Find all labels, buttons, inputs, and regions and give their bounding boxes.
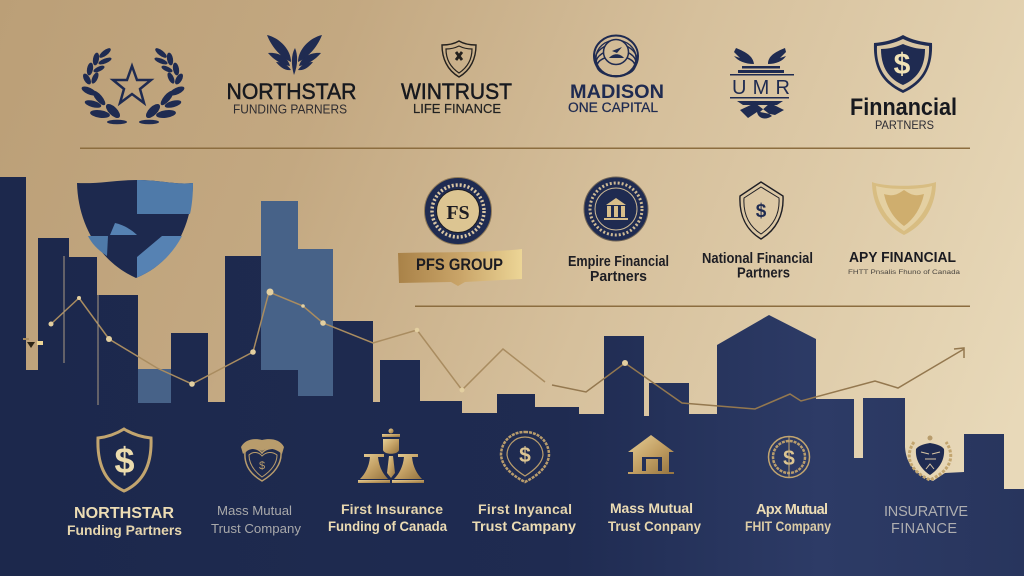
icon: gold coin: $ (783, 447, 795, 470)
logo: Northstar: FUNDING PARNERS (233, 102, 347, 116)
laurel left (80, 47, 127, 124)
icon: outline shield: $ (756, 201, 767, 222)
city skyline bar chart (0, 177, 1024, 576)
icon: laurel medal: $ (519, 444, 531, 467)
small gold marker (23, 338, 43, 348)
logo: Mass Mutual: Mass Mutual (217, 504, 292, 518)
blue bars (138, 201, 333, 403)
divider: top (80, 148, 970, 149)
logo: Northstar gold: NORTHSTAR (74, 505, 174, 522)
logo: Mass Mutual house: Trust Conpany (608, 518, 701, 534)
logo: First Insurance: Funding of Canada (328, 518, 447, 534)
icon: seal: FS (446, 202, 470, 224)
icon: wings (267, 35, 322, 75)
logo: APY Financial (848, 182, 960, 276)
logo: PFS Group (398, 178, 522, 286)
logo: First Inyancal (472, 432, 576, 534)
logo: Mass Mutual (211, 439, 301, 536)
logo: Madison: ONE CAPITAL (568, 100, 658, 115)
logo: UMR: UMR (732, 77, 790, 99)
logo: Northstar gold: Funding Partners (67, 522, 182, 538)
logo: First Inyancal: Trust Campany (472, 518, 576, 534)
logo: Financial: Finnancial (850, 94, 957, 121)
logo: Empire Financial: Partners (590, 269, 647, 285)
logo: Wintrust: LIFE FINANCE (413, 101, 501, 116)
icon: dollar shield: $ (894, 48, 911, 81)
top row logos (80, 35, 957, 132)
logo: Wintrust: WINTRUST (401, 79, 512, 104)
divider: middle (415, 306, 970, 307)
logo: National Financial (702, 182, 813, 282)
logo: Apx Mutual (745, 436, 831, 534)
line markers (48, 288, 628, 392)
logo: National Financial: Partners (737, 266, 790, 282)
icon: swirl circle (594, 36, 638, 76)
logo: APY Financial: APY FINANCIAL (849, 250, 956, 266)
logo: Madison: MADISON (570, 82, 664, 103)
icon: gold house (628, 435, 674, 474)
icon: bank seal (584, 177, 648, 241)
large blue shield (77, 180, 193, 278)
logo: National Financial: National Financial (702, 251, 813, 267)
logo: Northstar gold (67, 429, 182, 538)
logo: Apx Mutual: FHIT Company (745, 518, 831, 534)
logo: laurel star (80, 47, 186, 124)
logo: Insurative Finance (884, 436, 968, 537)
logo: Empire Financial (568, 177, 669, 285)
logo: First Inyancal: First Inyancal (478, 501, 572, 517)
logo: UMR (730, 48, 794, 119)
logo: Northstar (226, 35, 356, 116)
logo: Insurative Finance: INSURATIVE (884, 504, 968, 520)
ribbon (398, 249, 522, 286)
icon: gold shield (872, 182, 936, 235)
logo: Mass Mutual: Trust Company (211, 521, 301, 536)
logo: Insurative Finance: FINANCE (891, 521, 957, 537)
logo: First Insurance (328, 428, 447, 534)
logo: Financial: PARTNERS (875, 120, 934, 132)
logo: Apx Mutual: Apx Mutual (756, 502, 828, 518)
logo: Northstar: NORTHSTAR (226, 79, 356, 104)
logo: Wintrust (401, 41, 512, 116)
logo: First Insurance: First Insurance (341, 501, 443, 517)
logo: APY Financial: FHTT Pnsalis Fhuno of Canada (848, 269, 960, 276)
icon: shield (442, 41, 476, 77)
bottom row logos (67, 428, 968, 538)
icon: feathers (730, 48, 794, 119)
logo: Mass Mutual house: Mass Mutual (610, 500, 693, 516)
icon: crest with laurel (909, 436, 951, 480)
logo: Financial (850, 35, 957, 132)
middle row logos (398, 177, 960, 286)
gold trend line with arrow (48, 256, 964, 409)
logo: PFS Group: PFS GROUP (416, 256, 503, 274)
logo: Mass Mutual house (608, 435, 701, 534)
icon: gold dollar shield: $ (114, 440, 135, 481)
icon: gold goblets (358, 428, 424, 483)
icon: heart crest: $ (259, 460, 265, 472)
logo: Madison (568, 36, 664, 115)
logo: Empire Financial: Empire Financial (568, 254, 669, 270)
laurel right (139, 47, 186, 124)
